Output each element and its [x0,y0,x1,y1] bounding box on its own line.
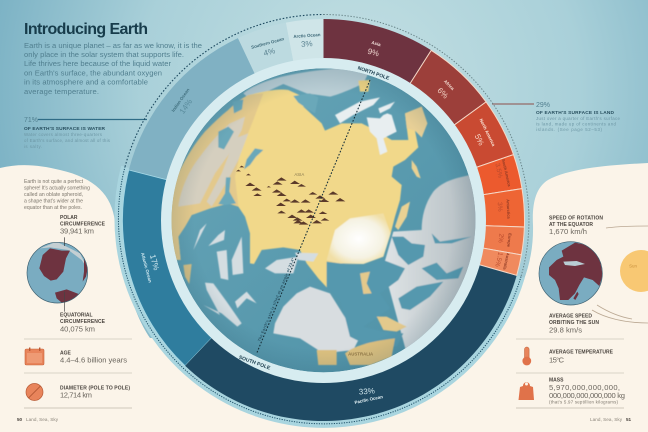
equatorial circumference stat: EQUATORIAL [60,312,93,318]
temperature stat [549,350,614,364]
segment: Antarctica [482,189,525,227]
callout: 29% land: islands. (See page 52–53) [536,127,603,132]
Sakhalin and Japan [395,160,421,230]
left panel intro text: equator than at the poles. [24,205,82,211]
grey cloud cover [383,173,483,353]
segment labels: 4% [263,46,276,58]
southern cloud mass [273,287,360,353]
intro text block: on Earth's surface, the abundant oxygen [24,68,162,78]
pale cloud bands over Europe [178,117,248,207]
title: Introducing Earth [24,21,148,38]
right panel: rotation speed stat: AT THE EQUATOR [549,222,593,228]
icon: calendar [25,348,44,365]
polar circumference stat [60,215,106,236]
callout: 29% land: 29% [536,102,550,109]
footer left: 50 [17,417,23,422]
segment labels: 14% [178,97,194,116]
orbit speed stat: AVERAGE SPEED [549,314,592,320]
segment: South America [475,155,522,195]
orbit speed stat: ORBITING THE SUN [549,320,599,326]
south pole label: SOUTH POLE [238,355,271,372]
segment labels: 3% [301,39,313,49]
soft painted surface [167,68,483,365]
mass stat: (that's 5.97 septillion kilograms) [549,400,619,404]
segment: Arctic Ocean [286,19,324,63]
segment labels: Indian Ocean [171,87,191,113]
segment labels: 3.5% [493,163,504,179]
sun: Sun [629,264,637,268]
footer right: Land, Sea, Sky [590,417,623,422]
Indonesian islands [360,272,407,332]
diameter stat [60,386,130,400]
intro text block [24,41,202,96]
callout: 29% land [492,102,621,132]
north pole label: NORTH POLE [357,65,391,82]
age stat [60,350,127,364]
diameter stat: DIAMETER (POLE TO POLE) [60,386,130,392]
dotted outlines [118,167,521,424]
Earth's axis dotted line [257,80,370,353]
Chukotka and Greenland tan [405,108,426,136]
orbit arcs [592,226,648,323]
footer right: 51 [626,417,632,422]
orbit speed stat: 29.8 km/s [549,326,582,334]
mass stat: MASS [549,378,564,384]
intro text block: Life thrives here because of the liquid water [24,59,171,68]
segment: Europe [481,226,524,255]
callout: 29% land: Just over a quarter of Earth's surface [536,116,621,121]
right panel: rotation speed stat: SPEED OF ROTATION [549,216,603,222]
segment labels: 17% [148,253,161,271]
polar circumference stat: 39,941 km [60,226,94,236]
segment labels: Atlantic Ocean [140,252,153,283]
segment labels: Pacific Ocean [354,394,384,405]
Asia and Europe mainland [167,90,427,287]
mountains of central Asia [236,166,345,225]
callout: 71% water [24,117,147,149]
northern ice and grey seas [243,68,370,99]
segment: Indian Ocean [129,38,255,180]
icon: diameter circle [26,384,43,400]
left panel intro text: Earth is not quite a perfect [24,179,84,185]
segment: Australia [477,248,521,275]
segment labels: Asia [371,40,382,47]
segment labels: 33% [359,386,375,397]
icon: weight [518,382,534,400]
equatorial circumference stat: CIRCUMFERENCE [60,319,106,325]
mass stat [549,378,625,404]
sun [620,250,648,292]
segment: Pacific Ocean [185,264,517,421]
inland seas [218,93,318,205]
outer band under oceans [118,167,521,424]
small globe: Africa [539,242,603,305]
intro text block: only place in the solar system that supports life. [24,50,184,59]
segment labels [140,32,513,405]
temperature stat: AVERAGE TEMPERATURE [549,350,614,356]
globe labels: ASIA [294,172,304,177]
segment labels: Australia [502,252,511,271]
segment: Atlantic Ocean [122,170,213,366]
small globe: Americas [27,237,88,312]
segment labels: Europe [506,233,513,248]
right panel: rotation speed stat: 1,670 km/h [549,227,587,236]
mass stat: 5,970,000,000,000, [549,383,620,392]
left panel intro text [24,179,90,211]
segment: North America [453,102,514,168]
intro text block: average temperature. [24,87,99,96]
intro text block: in its atmosphere and a comfortable [24,78,148,86]
orbit speed stat [549,314,599,334]
segment: Asia [324,19,431,85]
right panel: rotation speed stat [549,216,603,236]
Australia [317,338,395,365]
left panel intro text: sphere! It's actually something [24,186,90,192]
callout: 71% water: is salty. [24,144,42,149]
callout: 71% water: 71% [24,117,38,124]
icon: thermometer [522,347,531,365]
intro text block: Earth is a unique planet – as far as we know, it is the [24,41,202,50]
Madagascar [183,264,192,284]
limb shading [171,68,475,372]
globe [167,68,483,372]
segment: Africa [409,50,486,126]
age stat: 4.4–4.6 billion years [60,356,127,364]
segment labels: South America [501,158,512,188]
polar circumference stat: CIRCUMFERENCE [60,222,106,228]
polar circumference stat: POLAR [60,215,78,221]
segment labels: 6% [435,86,450,101]
temperature stat: 15°C [549,356,565,364]
segment labels: Africa [443,79,456,91]
Himalayan white mass [327,213,391,264]
western tan land [167,93,263,260]
callout: 29% land: is land, made up of continents and [536,122,617,126]
segment labels: 3% [496,202,503,212]
Arctic ice streaks [335,97,397,155]
ocean [171,68,475,372]
segment labels: 5% [473,133,486,147]
axis caption: The Earth's axis is tilted at an angle of 23.4° [257,257,296,342]
segment labels: Arctic Ocean [293,32,321,39]
footer left: Land, Sea, Sky [26,417,59,422]
segment labels: 1.5% [493,251,504,268]
segment labels: 2% [496,233,504,243]
equatorial circumference stat: 40,075 km [60,324,95,334]
diameter stat: 12,714 km [60,390,92,400]
left panel intro text: a shape that's wider at the [24,198,83,204]
open sea patches [392,237,425,265]
segment labels: Antarctica [505,199,512,220]
callout: 71% water: of Earth's surface, and almost all of this [24,138,111,143]
mass stat: 000,000,000,000,000 kg [549,391,625,400]
ring chart: Earth's surface by ocean and continent [118,14,529,424]
age stat: AGE [60,350,72,356]
light ring around globe [166,64,480,378]
callout: 71% water: OF EARTH'S SURFACE IS WATER [24,126,106,132]
left panel intro text: called an oblate spheroid, [24,192,83,198]
segment labels: 9% [367,47,380,58]
Indian Ocean cloud streaks [193,223,318,327]
callout: 71% water: Water covers almost three-quarters [24,132,103,137]
segment: Southern Ocean [238,23,294,75]
globe: AUSTRALIA [348,351,374,356]
equatorial circumference stat [60,312,106,334]
callout: 29% land: OF EARTH'S SURFACE IS LAND [536,110,615,116]
segment labels: North America [479,118,496,147]
segment labels: Southern Ocean [251,36,285,50]
